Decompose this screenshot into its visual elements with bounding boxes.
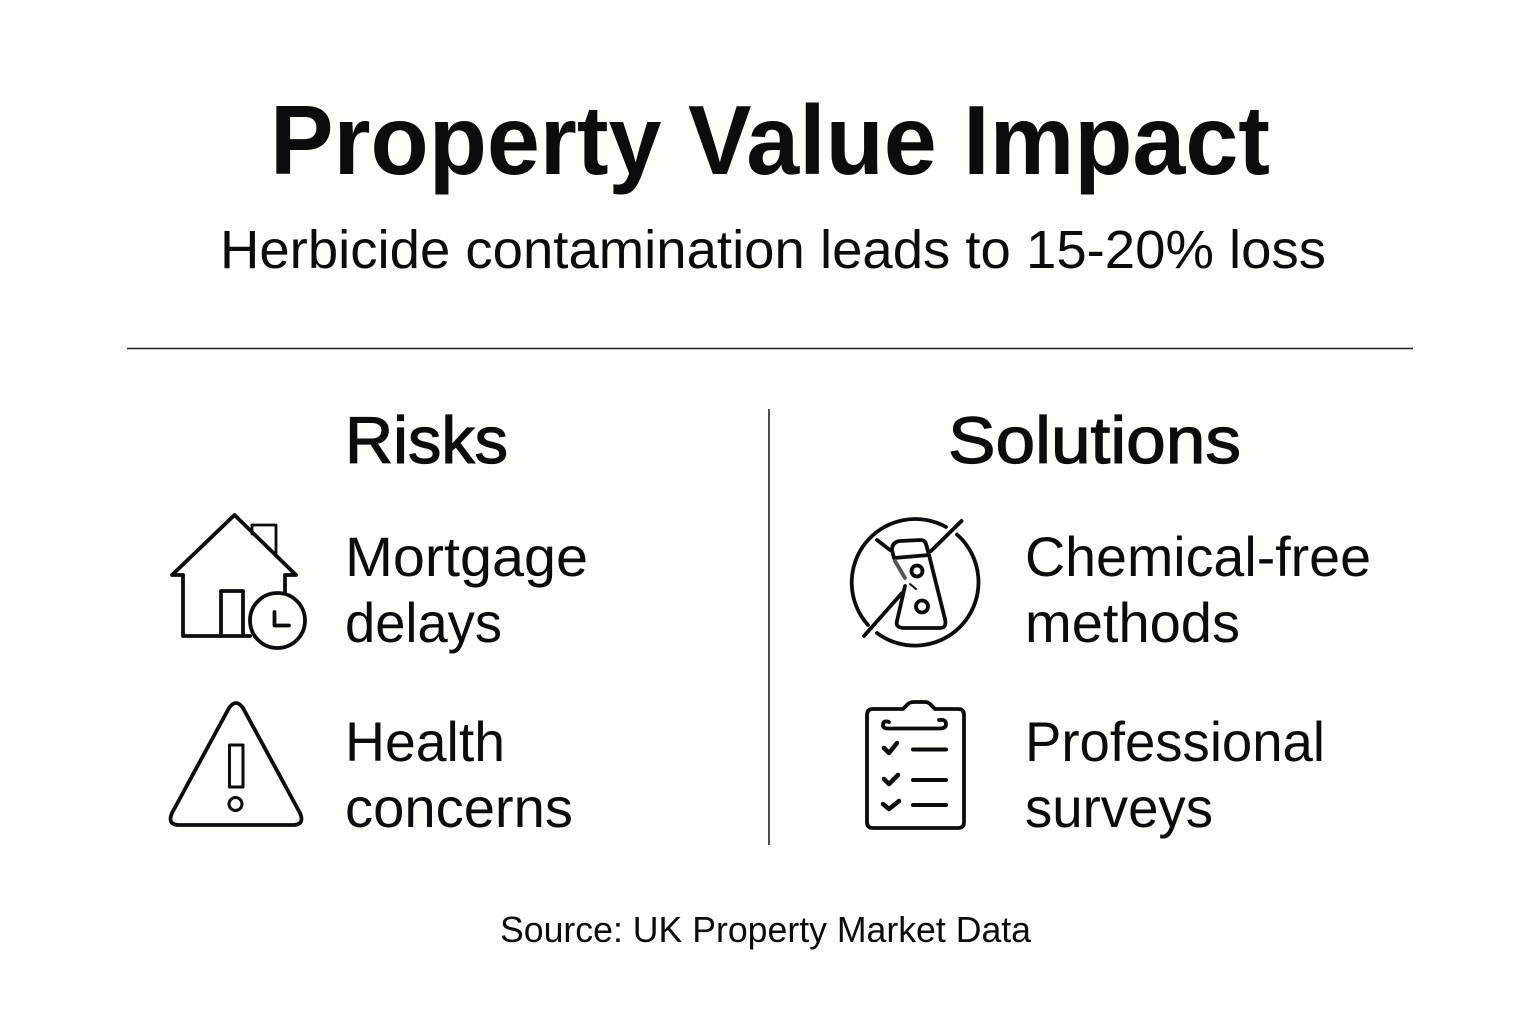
text: health concerns [345, 710, 573, 839]
text: chemical-free methods: methods [1025, 591, 1240, 654]
text: professional surveys: surveys [1025, 776, 1213, 839]
panel: solutions [852, 403, 1371, 839]
icon: house with clock [172, 515, 305, 648]
title: Property Value Impact [270, 85, 1270, 195]
icon: clipboard checklist [867, 702, 964, 828]
icon: warning triangle [171, 703, 301, 825]
text: mortgage delays [345, 525, 588, 654]
text: professional surveys: Professional [1025, 710, 1325, 773]
text: mortgage delays: Mortgage [345, 525, 588, 588]
subtitle: Herbicide contamination leads to 15-20% loss [220, 220, 1326, 280]
source note: Source: UK Property Market Data [500, 909, 1032, 950]
text: chemical-free methods [1025, 525, 1371, 654]
text: professional surveys [1025, 710, 1325, 839]
text: mortgage delays: delays [345, 591, 502, 654]
icon: crossed-out chemical flask [852, 519, 978, 646]
heading: risks: Risks [345, 403, 508, 477]
text: chemical-free methods: Chemical-free [1025, 525, 1371, 588]
text: health concerns: concerns [345, 776, 573, 839]
text: health concerns: Health [345, 710, 505, 773]
heading: solutions: Solutions [948, 403, 1241, 477]
panel: risks [171, 403, 588, 839]
